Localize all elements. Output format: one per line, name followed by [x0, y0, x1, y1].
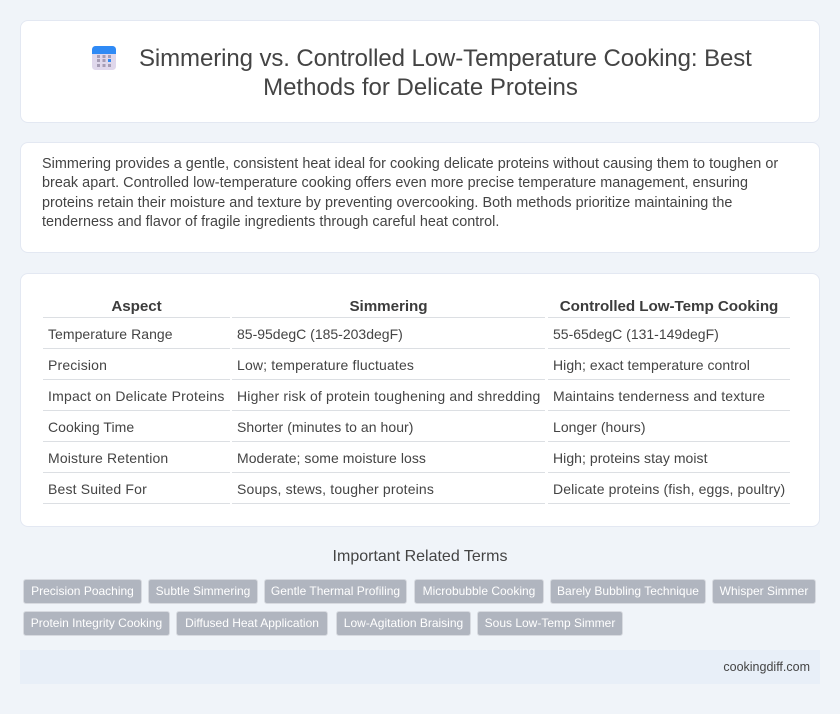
table header — [111, 298, 778, 315]
footer — [20, 650, 820, 684]
row: cooking time: Shorter (minutes to an hour) — [237, 419, 413, 435]
text block: intro: proteins retain their moisture and texture by preventing overcooking. Both methods prioritize maintaining the — [42, 195, 732, 211]
tag — [712, 579, 816, 604]
row: precision: Precision — [48, 357, 107, 373]
tags: related terms — [23, 579, 816, 636]
tag — [414, 579, 544, 604]
title — [139, 45, 752, 101]
row: best suited for: Delicate proteins (fish, eggs, poultry) — [553, 481, 785, 497]
table header: Aspect — [111, 298, 162, 315]
tag: Sous Low-Temp Simmer — [485, 616, 615, 630]
row: temperature range: 85-95degC (185-203degF) — [237, 326, 403, 342]
row: temperature range: Temperature Range — [48, 326, 173, 342]
icon: calendar — [92, 46, 116, 70]
row: temperature range — [48, 326, 719, 342]
row: cooking time: Cooking Time — [48, 419, 134, 435]
heading: related terms: Important Related Terms — [333, 548, 507, 565]
text block: intro: tenderness and flavor of fragile ingredients through careful heat control. — [42, 214, 499, 230]
tag: Precision Poaching — [31, 584, 134, 598]
row: moisture retention — [48, 450, 708, 466]
row: best suited for: Soups, stews, tougher proteins — [237, 481, 434, 497]
text block: intro: Simmering provides a gentle, consistent heat ideal for cooking delicate proteins without causing them to toughen or — [42, 156, 778, 172]
panel: comparison table — [20, 273, 820, 527]
tag — [148, 579, 258, 604]
tag: Barely Bubbling Technique — [557, 584, 699, 598]
title: Simmering vs. Controlled Low-Temperature Cooking: Best — [139, 45, 752, 72]
row: impact on delicate proteins: Maintains tenderness and texture — [553, 388, 765, 404]
title: Methods for Delicate Proteins — [263, 74, 578, 101]
tag — [264, 579, 407, 604]
tag: Low-Agitation Braising — [344, 616, 463, 630]
table: comparison — [43, 298, 790, 504]
table header: Controlled Low-Temp Cooking — [560, 298, 778, 315]
tag: Whisper Simmer — [720, 584, 808, 598]
table header: Simmering — [349, 298, 428, 315]
row: precision: High; exact temperature control — [553, 357, 750, 373]
text block: intro: break apart. Controlled low-temperature cooking offers even more precise temperature management, ensuring — [42, 175, 748, 191]
tag — [176, 611, 328, 636]
row: best suited for: Best Suited For — [48, 481, 147, 497]
row: temperature range: 55-65degC (131-149degF) — [553, 326, 719, 342]
tag: Diffused Heat Application — [185, 616, 319, 630]
tag — [23, 611, 170, 636]
row: impact on delicate proteins: Higher risk of protein toughening and shredding — [237, 388, 540, 404]
row: best suited for — [48, 481, 785, 497]
row: moisture retention: Moisture Retention — [48, 450, 168, 466]
row: precision: Low; temperature fluctuates — [237, 357, 414, 373]
tag: Gentle Thermal Profiling — [271, 584, 400, 598]
text block: intro — [42, 156, 778, 230]
row: moisture retention: High; proteins stay moist — [553, 450, 708, 466]
tag — [336, 611, 471, 636]
row: cooking time — [48, 419, 646, 435]
tag: Protein Integrity Cooking — [31, 616, 162, 630]
row: moisture retention: Moderate; some moisture loss — [237, 450, 426, 466]
row: precision — [48, 357, 750, 373]
tag — [23, 579, 142, 604]
tag — [550, 579, 706, 604]
tag — [477, 611, 623, 636]
footer credit: cookingdiff.com — [723, 660, 810, 674]
tag: Subtle Simmering — [156, 584, 250, 598]
row: impact on delicate proteins — [48, 388, 765, 404]
panel: header — [20, 20, 820, 123]
row: impact on delicate proteins: Impact on Delicate Proteins — [48, 388, 225, 404]
row: cooking time: Longer (hours) — [553, 419, 646, 435]
tag: Microbubble Cooking — [423, 584, 535, 598]
panel: intro paragraph — [20, 142, 820, 253]
